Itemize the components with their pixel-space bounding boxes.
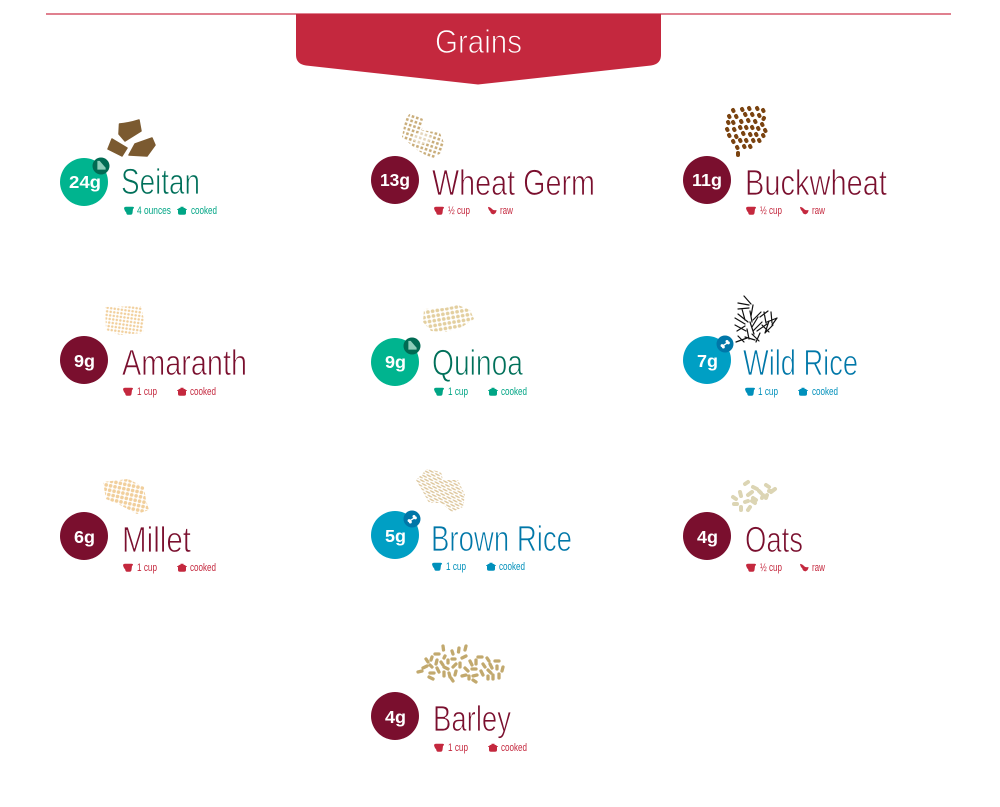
icon: amaranth grains (105, 306, 144, 335)
serving (746, 562, 825, 574)
protein badge (371, 338, 420, 386)
icon: wild rice grains (735, 296, 777, 342)
icon: seitan chunks (108, 120, 155, 156)
card: Buckwheat (683, 108, 887, 217)
icon: brown rice grains (416, 469, 465, 512)
protein badge: 11g (692, 170, 722, 190)
serving: cooked (501, 386, 527, 398)
name: Wild Rice (743, 342, 858, 383)
protein badge (60, 158, 110, 206)
serving: cooked (501, 742, 527, 754)
card: Amaranth (60, 306, 247, 398)
serving: ½ cup (760, 205, 782, 217)
serving: 1 cup (137, 386, 157, 398)
serving (746, 205, 825, 217)
protein badge (371, 692, 419, 740)
serving: cooked (812, 386, 838, 398)
card: Seitan (60, 120, 217, 217)
card: Millet (60, 479, 216, 574)
protein badge (60, 336, 108, 384)
serving (124, 205, 217, 217)
icon: barley grains (418, 646, 503, 682)
card: Brown Rice (371, 469, 572, 573)
serving (123, 562, 216, 574)
serving: 1 cup (446, 561, 466, 573)
card: Oats (683, 482, 825, 574)
protein badge (683, 156, 731, 204)
serving: raw (812, 205, 825, 217)
serving: 1 cup (137, 562, 157, 574)
serving (434, 742, 527, 754)
serving (745, 386, 838, 398)
card: Wild Rice (683, 296, 858, 398)
serving: cooked (190, 562, 216, 574)
protein badge: 5g (385, 526, 406, 546)
card: Quinoa (371, 305, 527, 398)
serving: 1 cup (448, 386, 468, 398)
serving: cooked (499, 561, 525, 573)
serving: cooked (190, 386, 216, 398)
icon: quinoa grains (423, 305, 474, 332)
icon: oat grains (733, 482, 775, 510)
serving (123, 386, 216, 398)
serving: raw (812, 562, 825, 574)
protein badge (683, 512, 731, 560)
serving: 4 ounces (137, 205, 171, 217)
name: Seitan (121, 161, 200, 202)
serving: 1 cup (758, 386, 778, 398)
name: Buckwheat (745, 162, 887, 203)
serving (434, 205, 513, 217)
icon: wheat germ grains (402, 113, 444, 159)
protein badge (683, 336, 734, 384)
name: Quinoa (432, 342, 524, 383)
protein badge: 4g (385, 707, 406, 727)
name: Brown Rice (431, 518, 572, 559)
name: Millet (122, 519, 191, 560)
name: Oats (745, 519, 803, 560)
icon: millet grains (103, 479, 149, 514)
serving: raw (500, 205, 513, 217)
header rule (46, 13, 951, 15)
name: Amaranth (122, 342, 247, 383)
card: Wheat Germ (371, 113, 595, 217)
protein badge: 9g (385, 352, 406, 372)
protein badge: 6g (74, 527, 95, 547)
icon: buckwheat grains (727, 108, 766, 155)
serving (432, 561, 525, 573)
name: Barley (433, 698, 511, 739)
title: Grains (435, 23, 522, 60)
title banner (296, 14, 661, 84)
protein badge: 7g (697, 351, 718, 371)
protein badge: 9g (74, 351, 95, 371)
serving: ½ cup (448, 205, 470, 217)
name: Wheat Germ (432, 162, 595, 203)
serving (434, 386, 527, 398)
protein badge (371, 510, 420, 559)
protein badge (60, 512, 108, 560)
serving: 1 cup (448, 742, 468, 754)
protein badge: 24g (69, 172, 101, 192)
protein badge: 4g (697, 527, 718, 547)
protein badge (371, 156, 419, 204)
protein badge: 13g (380, 170, 410, 190)
serving: ½ cup (760, 562, 782, 574)
serving: cooked (191, 205, 217, 217)
card: Barley (371, 646, 527, 754)
